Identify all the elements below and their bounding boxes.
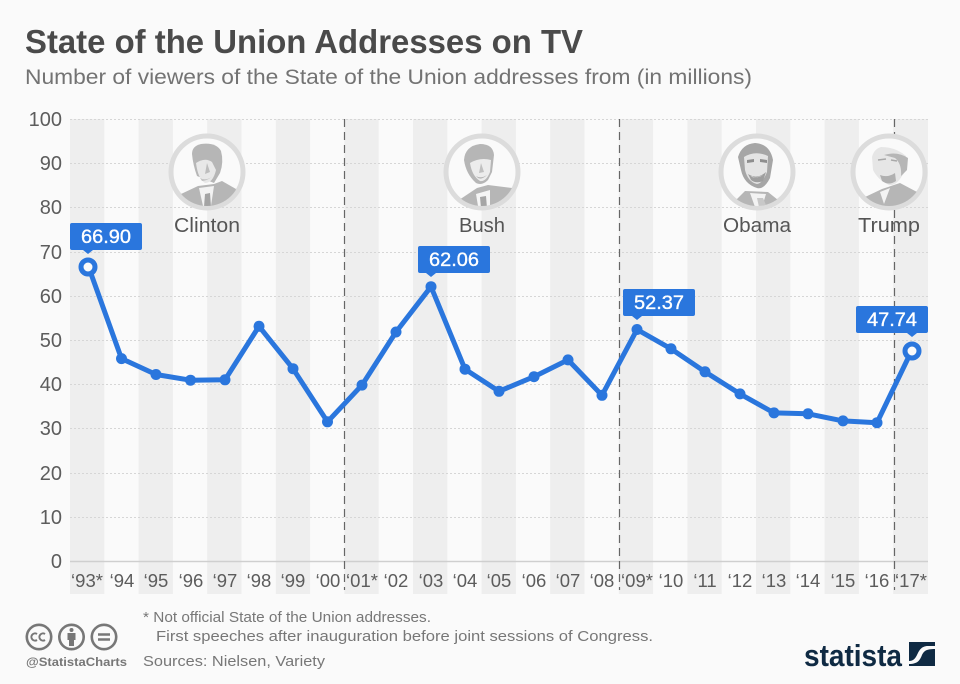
x axis labels: ‘00 [316, 570, 340, 591]
x axis labels: ‘11 [693, 570, 717, 591]
x axis labels: ‘10 [659, 570, 683, 591]
x axis labels: ‘94 [110, 570, 134, 591]
callout: 66.90: 66.90 [81, 226, 131, 248]
icon: creative commons licence [27, 625, 116, 649]
x axis labels: ‘16 [865, 570, 889, 591]
x axis labels: ‘96 [179, 570, 203, 591]
callout: 66.90 [70, 223, 142, 254]
marker: 2017 end [905, 344, 919, 358]
x axis labels: ‘02 [384, 570, 408, 591]
callout: 52.37 [623, 289, 695, 320]
logo: statista: statista [804, 638, 903, 673]
portrait: Bush [446, 136, 518, 208]
title: State of the Union Addresses on TV [25, 23, 583, 60]
x axis labels: ‘15 [831, 570, 855, 591]
label: Bush: Bush [459, 215, 505, 237]
x axis labels: ‘01* [346, 570, 378, 591]
alternating year bands [70, 119, 928, 594]
x axis labels: ‘97 [213, 570, 237, 591]
footnote: * Not official State of the Union addresses. [143, 609, 431, 626]
x axis labels: ‘06 [522, 570, 546, 591]
x axis labels: ‘99 [281, 570, 305, 591]
footnote [143, 609, 653, 645]
x axis labels: ‘07 [556, 570, 580, 591]
y axis labels: 100 [29, 109, 62, 131]
data points [116, 281, 882, 428]
portrait: Clinton [171, 136, 243, 208]
label: Trump: Trump [858, 215, 920, 237]
chart: viewers line chart [29, 109, 928, 594]
x axis labels: ‘04 [453, 570, 477, 591]
y axis labels: 90 [40, 153, 62, 175]
marker: 1993 start [81, 260, 95, 274]
y axis labels: 80 [40, 197, 62, 219]
y axis labels: 20 [40, 463, 62, 485]
data line [88, 265, 912, 423]
y axis labels: 50 [40, 330, 62, 352]
callout: 47.74: 47.74 [867, 309, 917, 331]
x axis labels: ‘98 [247, 570, 271, 591]
x axis labels: ‘17* [895, 570, 927, 591]
y axis labels: 70 [40, 242, 62, 264]
x axis labels: ‘13 [762, 570, 786, 591]
callout: 62.06: 62.06 [429, 249, 479, 271]
portrait: Obama [721, 136, 793, 208]
x axis labels: ‘08 [590, 570, 614, 591]
x axis labels: ‘03 [419, 570, 443, 591]
x axis labels: ‘93* [71, 570, 103, 591]
label: Obama: Obama [723, 215, 792, 237]
callout: 52.37: 52.37 [634, 292, 684, 314]
y axis labels: 60 [40, 286, 62, 308]
y axis labels: 40 [40, 374, 62, 396]
y axis labels: 10 [40, 507, 62, 529]
x axis labels: ‘12 [728, 570, 752, 591]
x axis labels: ‘95 [144, 570, 168, 591]
x axis labels: ‘09* [621, 570, 653, 591]
footnote: First speeches after inauguration before joint sessions of Congress. [156, 628, 653, 645]
handle: @StatistaCharts [26, 655, 127, 669]
y axis labels: 30 [40, 418, 62, 440]
subtitle: Number of viewers of the State of the Union addresses from (in millions) [25, 66, 752, 89]
x axis labels [71, 570, 927, 591]
label: Clinton: Clinton [174, 215, 240, 237]
source: Sources: Nielsen, Variety [143, 653, 326, 670]
y axis labels: 0 [51, 551, 62, 573]
x axis labels: ‘14 [796, 570, 820, 591]
portrait: Trump [853, 136, 925, 208]
y axis labels [29, 109, 62, 573]
callout: 47.74 [856, 306, 928, 337]
x axis labels: ‘05 [487, 570, 511, 591]
callout: 62.06 [418, 246, 490, 277]
